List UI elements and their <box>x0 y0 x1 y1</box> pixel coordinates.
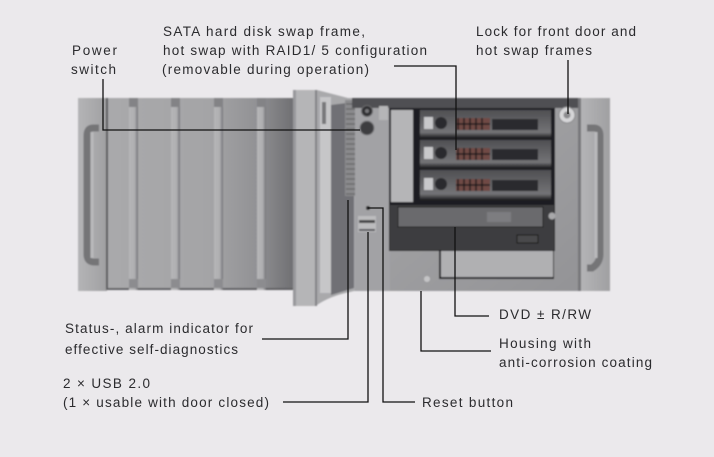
centre chassis face <box>352 98 580 291</box>
callout: DVD <box>455 227 591 322</box>
callout: reset button <box>368 208 513 410</box>
callout: USB: 2 × USB 2.0 <box>63 376 150 391</box>
callout: DVD: DVD ± R/RW <box>499 307 591 322</box>
drive bay surround <box>389 108 555 251</box>
callout: status indicator: effective self-diagnostics <box>65 342 238 357</box>
callout: power switch <box>71 43 360 130</box>
callout: SATA hard disk swap frame <box>162 24 456 150</box>
callout: SATA hard disk swap frame: hot swap with RAID1/ 5 configuration <box>163 43 427 58</box>
callout: lock: hot swap frames <box>476 43 592 58</box>
SATA swap frame 1 <box>420 110 551 138</box>
callout: lock <box>476 24 636 114</box>
empty lower bay <box>424 250 554 282</box>
right rack ear with handle <box>578 98 610 291</box>
SATA swap frame 3 <box>420 170 551 200</box>
callout: SATA hard disk swap frame: (removable during operation) <box>162 62 369 77</box>
callout: SATA hard disk swap frame: SATA hard disk swap frame, <box>163 24 365 39</box>
callout: housing: anti-corrosion coating <box>499 355 652 370</box>
open front door <box>293 90 358 306</box>
door lock <box>559 107 575 123</box>
left closed bay panel with slats <box>106 98 293 290</box>
blank bay plate <box>391 110 413 202</box>
callout: status indicator <box>65 200 348 357</box>
callout: status indicator: Status-, alarm indicator for <box>65 321 254 336</box>
DVD drive <box>390 205 556 250</box>
SATA swap frame 2 <box>420 140 551 168</box>
left rack ear with handle <box>78 98 107 291</box>
power switch and reset knob <box>360 106 374 135</box>
callout: USB <box>63 232 368 410</box>
callout: housing: Housing with <box>499 336 591 351</box>
callout: power switch: Power <box>72 43 118 58</box>
server chassis <box>78 90 610 306</box>
callout: USB: (1 × usable with door closed) <box>63 395 269 410</box>
callout: reset button: Reset button <box>422 395 513 410</box>
callout: lock: Lock for front door and <box>476 24 636 39</box>
control column <box>352 98 580 291</box>
callout: power switch: switch <box>71 62 116 77</box>
callout: housing <box>421 291 652 370</box>
